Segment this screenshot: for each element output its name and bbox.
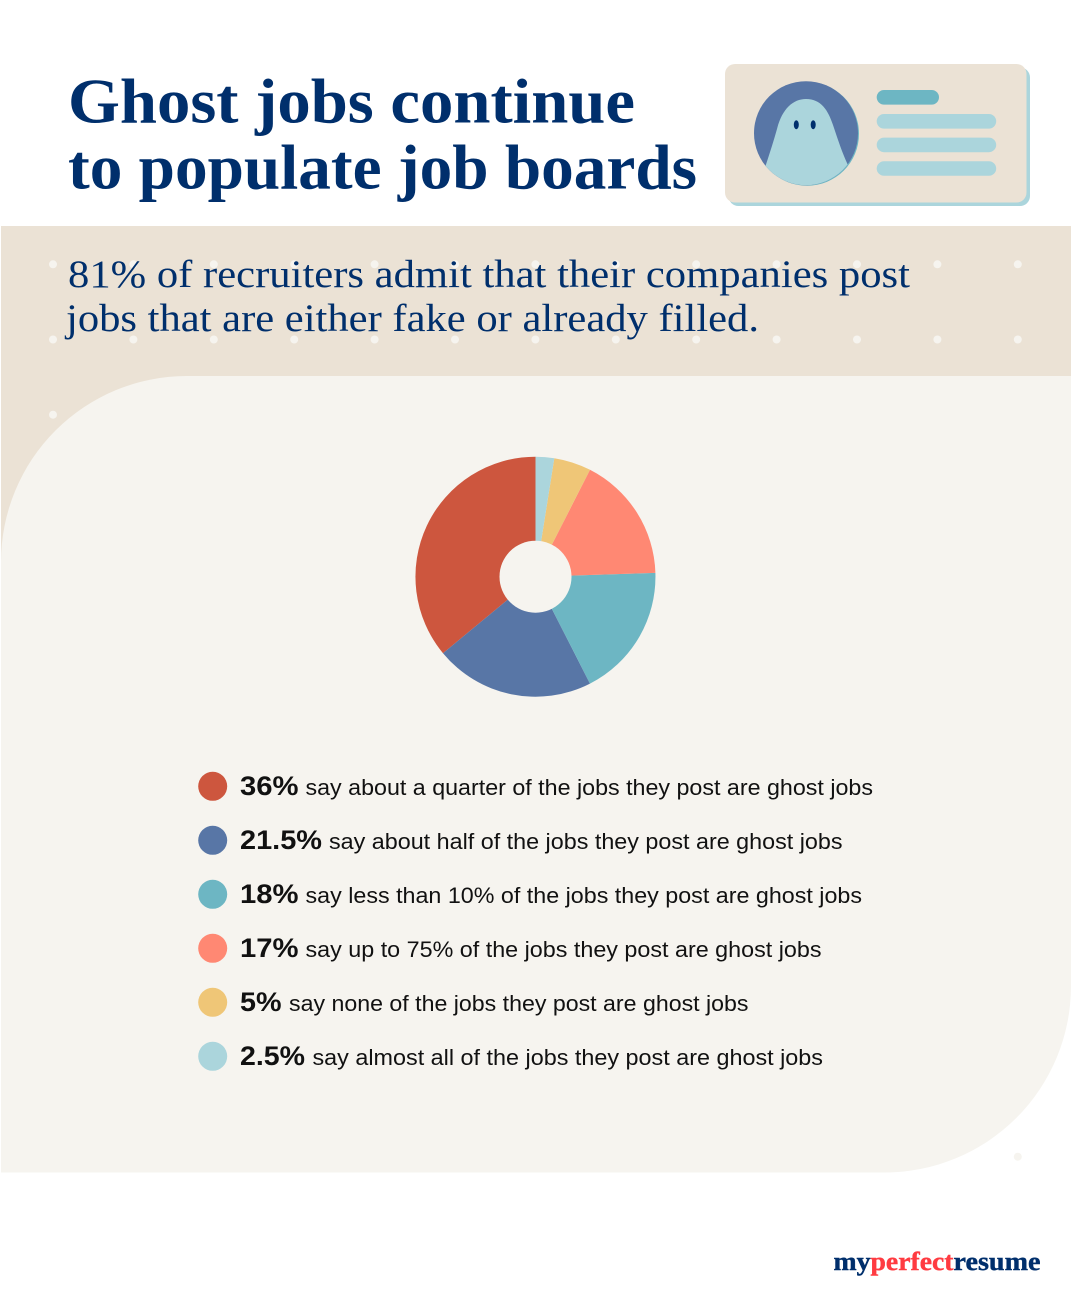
donut hole — [500, 541, 572, 613]
legend item: 21.5%: say about half of the jobs they post are ghost jobs — [329, 829, 842, 854]
legend item: 5%: say none of the jobs they post are ghost jobs — [289, 991, 748, 1016]
title: Ghost jobs continue — [68, 66, 635, 136]
icon: ghost job profile card — [725, 64, 1030, 206]
slice: 21.5% — [443, 577, 590, 697]
legend item: 21.5% — [198, 825, 842, 855]
title: to populate job boards — [68, 132, 697, 202]
title — [68, 66, 697, 202]
subheading — [64, 253, 910, 340]
legend item: 18%: 18% — [240, 879, 298, 909]
legend — [198, 771, 873, 1071]
legend item: 17% — [198, 933, 821, 963]
legend item: 2.5% — [198, 1041, 823, 1071]
legend item: 21.5%: 21.5% — [240, 825, 322, 855]
subheading: jobs that are either fake or already filled. — [64, 297, 759, 340]
logo: myperfectresume: my — [834, 1247, 870, 1276]
legend item: 36% — [198, 771, 873, 801]
slice: 36% — [415, 457, 536, 653]
slice: 2.5% — [536, 457, 554, 577]
tan banner — [1, 226, 1071, 566]
donut chart — [415, 457, 655, 697]
legend item: 18%: say less than 10% of the jobs they post are ghost jobs — [306, 883, 862, 908]
cream content panel — [1, 376, 1071, 1172]
legend item: 36%: 36% — [240, 771, 298, 801]
slice: 18% — [536, 573, 655, 684]
subheading: 81% of recruiters admit that their companies post — [68, 253, 910, 296]
legend item: 17%: say up to 75% of the jobs they post are ghost jobs — [306, 937, 822, 962]
legend item: 36%: say about a quarter of the jobs they post are ghost jobs — [306, 775, 873, 800]
legend item: 2.5%: say almost all of the jobs they post are ghost jobs — [312, 1045, 823, 1070]
logo: myperfectresume — [834, 1247, 1040, 1276]
slice: 5% — [536, 458, 590, 577]
slice: 17% — [536, 470, 655, 577]
legend item: 2.5%: 2.5% — [240, 1041, 305, 1071]
legend item: 5% — [198, 987, 748, 1017]
legend item: 5%: 5% — [240, 987, 282, 1017]
legend item: 18% — [198, 879, 862, 909]
logo: myperfectresume: resume — [954, 1247, 1040, 1276]
logo: myperfectresume: perfect — [870, 1247, 954, 1276]
legend item: 17%: 17% — [240, 933, 298, 963]
